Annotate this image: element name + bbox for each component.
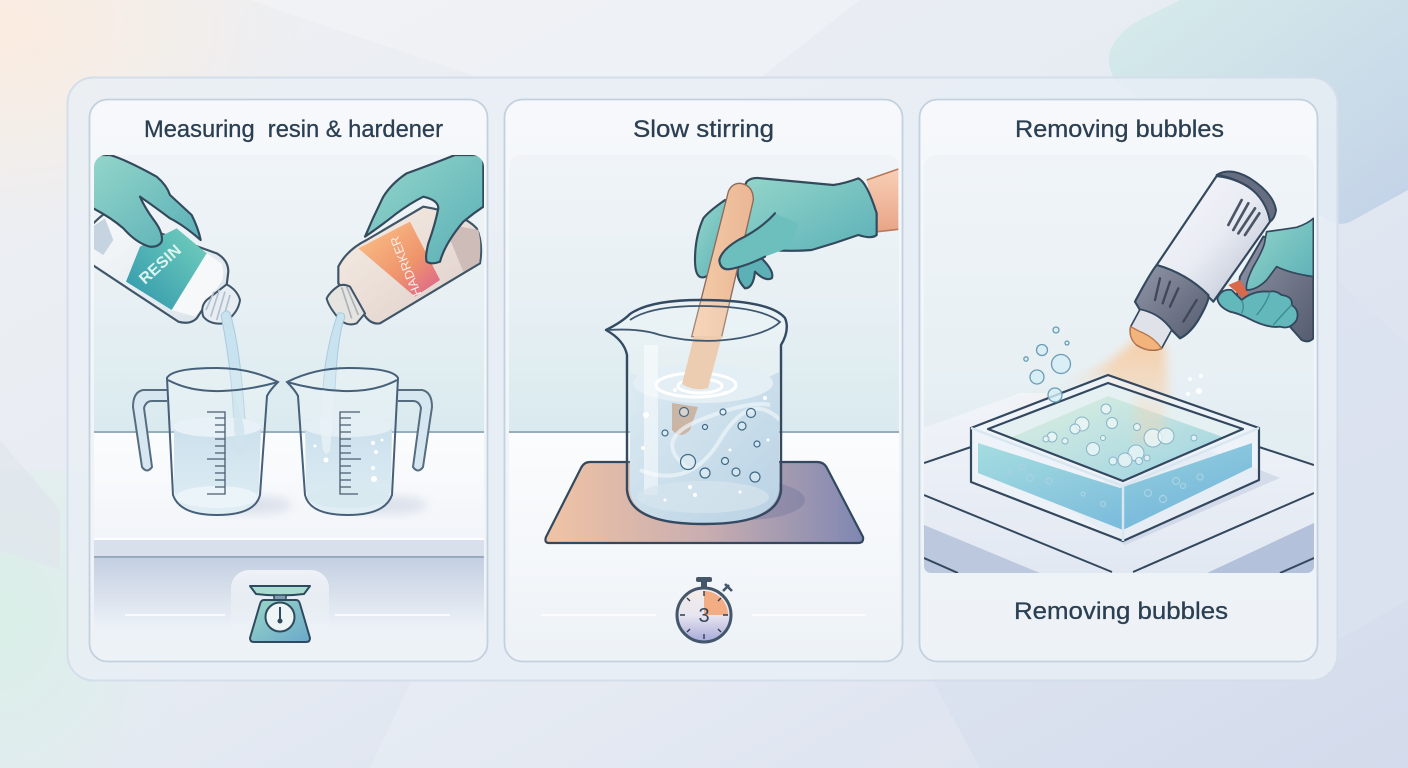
icon: heat gun and hand [1130,172,1313,350]
text: resin label: RESIN [136,242,185,288]
icon: left glove [90,155,201,247]
icon: sparkle dots [1186,374,1203,396]
chart: right beaker scale [340,412,361,494]
icon: resin bottle [90,213,240,324]
panel: slow stirring [504,100,902,662]
caption: removing bubbles: Removing bubbles [1014,598,1228,625]
illustration: heat gun over tray [924,155,1314,573]
heading: removing bubbles: Removing bubbles [1015,116,1224,143]
panel: measuring resin and hardener [90,100,488,662]
icon: platform [924,393,1314,573]
panel: removing bubbles [920,100,1318,662]
icon: right beaker [287,368,432,515]
heading: slow stirring: Slow stirring [633,116,774,143]
icon: hardener bottle [327,207,481,324]
icon: mat [545,462,863,543]
icon: hardener stream [323,313,345,390]
icon: weighing scale [125,570,450,650]
illustration: pouring into beakers [90,155,484,642]
text: timer number: 3 [698,605,710,627]
icon: left beaker [133,368,292,515]
illustration: stirring beaker [509,168,899,544]
icon: heat glow [1078,338,1172,400]
icon: resin tray [971,375,1280,545]
icon: resin stream [221,311,245,425]
icon: rising bubbles [1024,327,1070,402]
text: hardener label: HADRKER [388,234,424,298]
icon: timer [541,577,866,642]
icon: gloved hand and stick [692,169,898,337]
chart: left beaker scale [207,412,225,494]
main glass panel [68,78,1338,680]
icon: right glove [365,155,483,263]
heading: measuring: Measuring resin & hardener [144,116,443,143]
icon: beaker [606,300,805,524]
